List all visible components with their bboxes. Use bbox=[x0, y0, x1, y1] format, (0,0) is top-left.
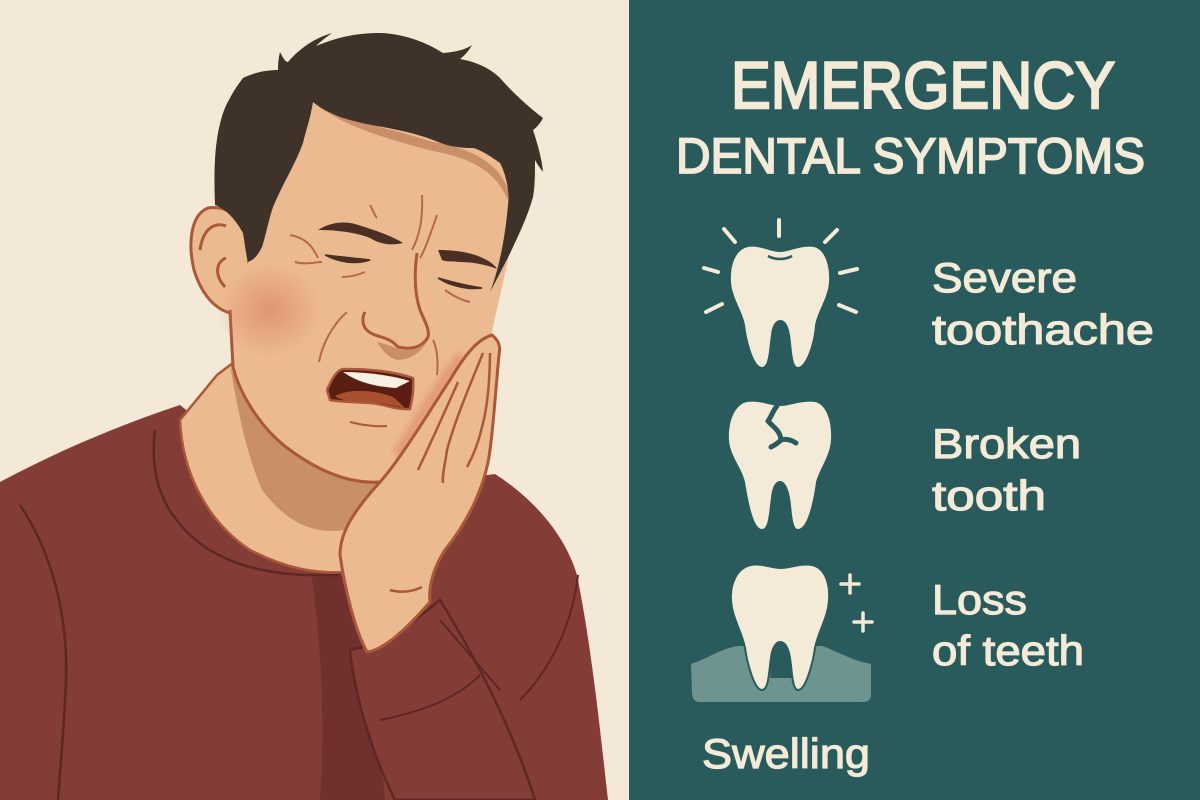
right closed eye bbox=[438, 278, 482, 289]
label: swelling: Swelling bbox=[702, 730, 870, 777]
neck and chest bbox=[180, 350, 385, 572]
symptom: severe toothache bbox=[704, 220, 1154, 367]
cheek redness by hand bbox=[398, 355, 462, 455]
label: Severe bbox=[932, 254, 1077, 301]
hair bbox=[214, 33, 543, 292]
inner ear bbox=[200, 225, 226, 287]
nose bbox=[363, 253, 428, 348]
forearm sleeve bbox=[350, 600, 535, 800]
mouth bbox=[327, 369, 413, 409]
left eyebrow bbox=[318, 222, 403, 244]
hand bbox=[340, 335, 500, 652]
label: Loss bbox=[932, 576, 1027, 623]
symptom: broken tooth bbox=[729, 402, 1081, 529]
symptom: loss of teeth bbox=[691, 565, 1084, 702]
tongue bbox=[335, 391, 405, 408]
symptom: severe toothache: toothache bbox=[932, 306, 1154, 353]
title: DENTAL SYMPTOMS bbox=[676, 128, 1145, 184]
shirt bbox=[0, 405, 608, 800]
symptom: broken tooth: tooth bbox=[932, 472, 1046, 519]
lower lip crease bbox=[350, 422, 387, 426]
icon: tooth with pain rays bbox=[704, 220, 857, 367]
ear bbox=[191, 207, 250, 313]
face bbox=[230, 90, 515, 482]
title: EMERGENCY bbox=[731, 48, 1115, 122]
cheek blush bbox=[218, 262, 322, 358]
panel: illustration background bbox=[0, 0, 629, 800]
icon: gum bbox=[691, 646, 871, 702]
right eyebrow bbox=[438, 250, 497, 269]
teeth bbox=[343, 372, 410, 388]
nose shadow bbox=[377, 340, 428, 360]
icon: cracked tooth bbox=[729, 402, 831, 529]
panel: symptoms background bbox=[629, 0, 1200, 800]
left closed eye bbox=[325, 255, 370, 262]
jaw line bbox=[230, 310, 380, 482]
illustration: man with toothache bbox=[0, 33, 608, 800]
icon: gum socket bbox=[770, 645, 792, 678]
label line 2: of teeth bbox=[932, 627, 1084, 674]
sleeve folds bbox=[380, 620, 500, 720]
face wrinkles bbox=[290, 195, 470, 375]
icon: sparkles bbox=[841, 575, 872, 631]
label: Broken bbox=[932, 420, 1081, 467]
hairline shadow bbox=[313, 102, 508, 200]
finger lines bbox=[390, 353, 490, 592]
title bbox=[676, 48, 1145, 184]
neck shadow bbox=[230, 365, 380, 531]
icon: tooth in gum bbox=[731, 565, 829, 690]
